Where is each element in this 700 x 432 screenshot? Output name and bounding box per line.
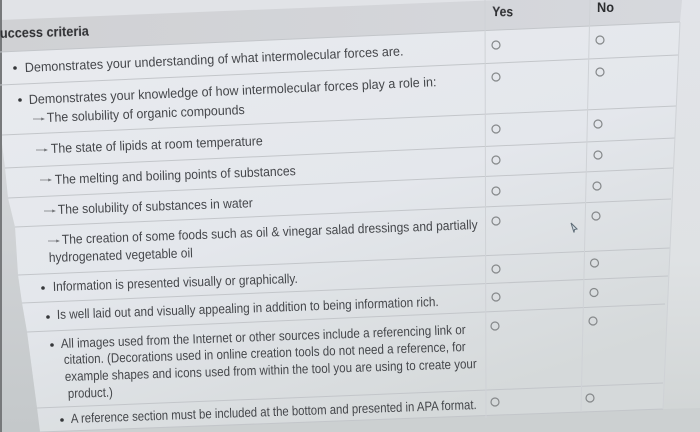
- criteria text: The melting and boiling points of substances: [55, 163, 296, 187]
- criteria text: A reference section must be included at the bottom and presented in APA format.: [71, 397, 477, 426]
- column heading: yes: Yes: [492, 3, 514, 20]
- criteria text: example shapes and icons used from within the tool you are using to create your: [65, 356, 477, 384]
- criteria text: The solubility of organic compounds: [47, 102, 245, 125]
- header band: [0, 0, 682, 52]
- light area above header band: [0, 0, 682, 20]
- criteria text: [24, 43, 478, 426]
- criteria text: Demonstrates your understanding of what intermolecular forces are.: [24, 43, 404, 75]
- criteria text: The state of lipids at room temperature: [51, 133, 263, 156]
- no radio buttons: [586, 36, 604, 402]
- icon: mouse cursor: [571, 223, 577, 232]
- left margin: [0, 128, 40, 432]
- criteria text: hydrogenated vegetable oil: [49, 245, 193, 265]
- sub-item arrows: [33, 118, 59, 242]
- criteria text: citation. (Decorations used in online creation tools do not need a reference, for: [64, 339, 466, 367]
- bullets: [13, 66, 64, 422]
- left dark edge: [0, 0, 2, 432]
- yes radio buttons: [491, 41, 500, 406]
- criteria text: product.): [68, 385, 113, 401]
- criteria text: Is well laid out and visually appealing in addition to being information rich.: [57, 294, 439, 322]
- criteria text: Demonstrates your knowledge of how intermolecular forces play a role in:: [28, 74, 437, 107]
- criteria text: The creation of some foods such as oil & vinegar salad dressings and partially: [62, 217, 478, 247]
- heading: success criteria: uccess criteria: [0, 23, 89, 41]
- criteria text: All images used from the Internet or other sources include a referencing link or: [61, 322, 466, 351]
- criteria text: Information is presented visually or graphically.: [53, 271, 298, 294]
- bottom strip: [40, 408, 700, 432]
- criteria text: The solubility of substances in water: [58, 195, 254, 217]
